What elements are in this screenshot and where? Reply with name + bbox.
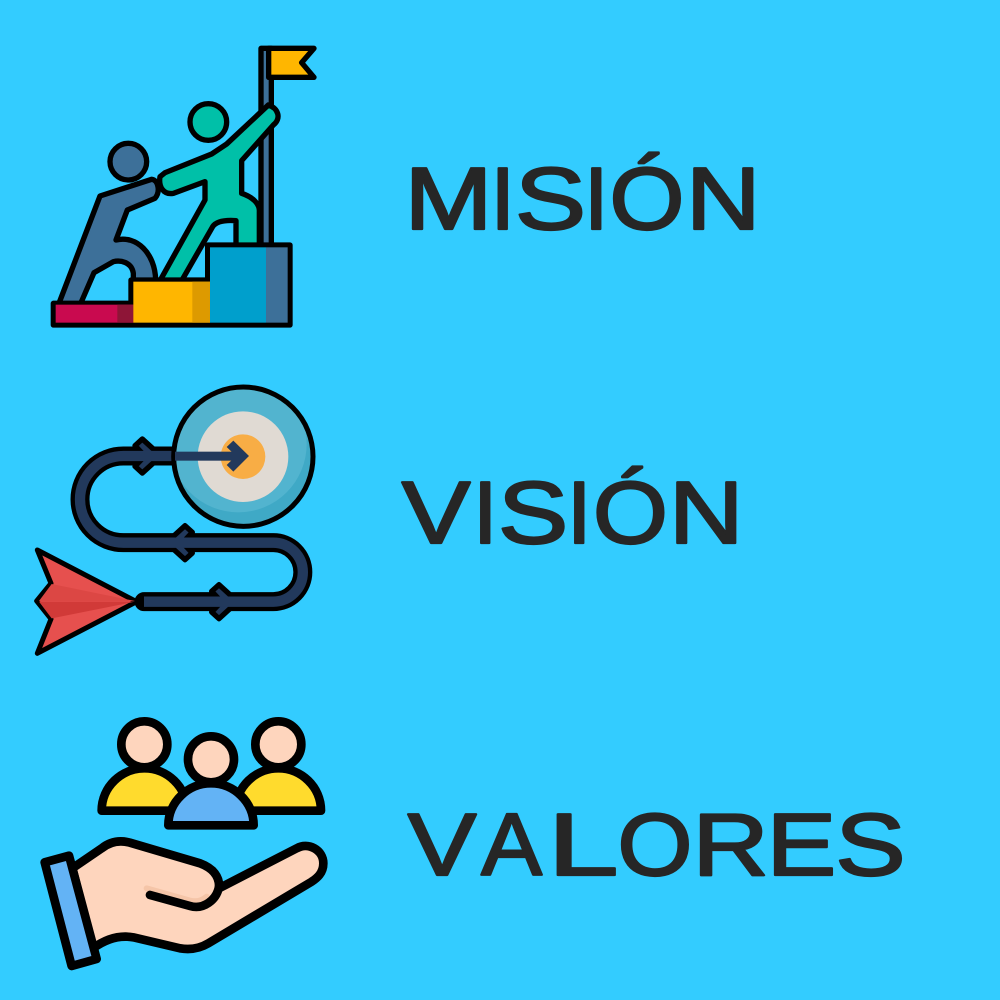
path chevrons	[135, 439, 238, 619]
title: MISIÓN: Ó	[610, 149, 684, 248]
flag	[269, 48, 314, 77]
title: VALORES: O	[618, 795, 692, 894]
title: MISIÓN: I	[584, 149, 608, 248]
title: VALORES: E	[767, 795, 836, 894]
centre person	[168, 736, 254, 825]
title: VISIÓN: I	[567, 463, 591, 562]
title: VALORES: A	[481, 795, 542, 894]
left person	[102, 721, 187, 811]
cuff	[45, 856, 97, 966]
red step	[56, 305, 133, 323]
title: VALORES: V	[408, 795, 477, 894]
right person	[236, 721, 321, 811]
green person	[160, 104, 278, 281]
winding path fill	[80, 456, 303, 602]
yellow step	[133, 282, 210, 323]
blue step	[210, 247, 288, 323]
paper dart	[37, 550, 137, 653]
hand	[72, 841, 323, 949]
title: VISIÓN: I	[473, 463, 497, 562]
title: VISIÓN: Ó	[593, 463, 668, 562]
title: MISIÓN: I	[490, 149, 515, 248]
title: VALORES: L	[548, 795, 619, 894]
title: MISIÓN: S	[515, 149, 586, 248]
title: VISIÓN: V	[402, 463, 471, 562]
title: MISIÓN: N	[686, 149, 760, 248]
target	[170, 376, 313, 526]
blue person	[58, 143, 158, 305]
winding path outline	[80, 456, 303, 602]
arrow into target	[175, 441, 249, 472]
icon: two people climbing to a flag	[53, 48, 314, 325]
title: VISIÓN: S	[498, 463, 568, 562]
title: VALORES: R	[692, 795, 769, 894]
flag pole	[261, 48, 271, 248]
icon: winding path from dart to target	[37, 376, 313, 653]
title: VISIÓN: N	[669, 463, 744, 562]
icon: hand holding three people	[45, 721, 323, 966]
title: VALORES: S	[835, 795, 906, 894]
stepped podium	[53, 245, 290, 325]
title: MISIÓN: M	[404, 149, 492, 248]
